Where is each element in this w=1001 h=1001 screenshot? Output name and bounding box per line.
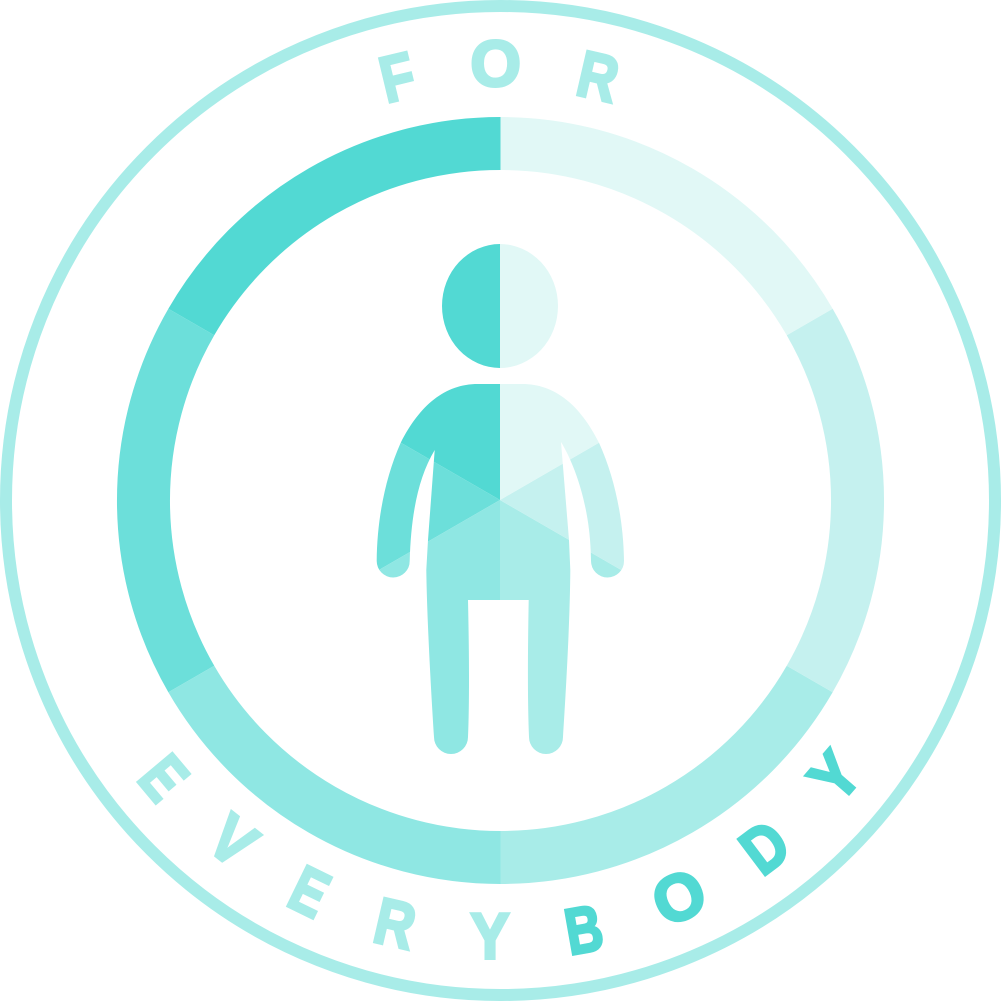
heading: EVERY: R <box>368 884 422 964</box>
heading: BODY: Y <box>795 738 876 815</box>
ring segment: top right <box>500 144 810 322</box>
segmented ring <box>143 144 858 858</box>
heading: FOR: F <box>373 38 422 117</box>
heading: FOR: R <box>571 37 625 117</box>
heading: BODY: O <box>641 853 717 941</box>
ring segment: bottom right <box>500 679 810 858</box>
ring segment: top left <box>191 144 501 322</box>
ring segment: left <box>143 322 191 679</box>
heading: EVERY <box>124 742 510 973</box>
heading: EVERY: E <box>124 742 202 814</box>
heading: EVERY: Y <box>470 901 510 973</box>
heading: EVERY: V <box>195 801 270 882</box>
heading: FOR: O <box>470 27 521 100</box>
heading: FOR <box>373 27 625 117</box>
heading: BODY: D <box>727 806 803 888</box>
heading: EVERY: E <box>278 852 340 932</box>
ring segment: right <box>810 322 858 679</box>
ring segment: bottom left <box>191 679 501 858</box>
heading: BODY <box>560 738 876 969</box>
icon: human figure divided into six colour wedges <box>376 244 624 754</box>
heading: BODY: B <box>560 891 608 969</box>
